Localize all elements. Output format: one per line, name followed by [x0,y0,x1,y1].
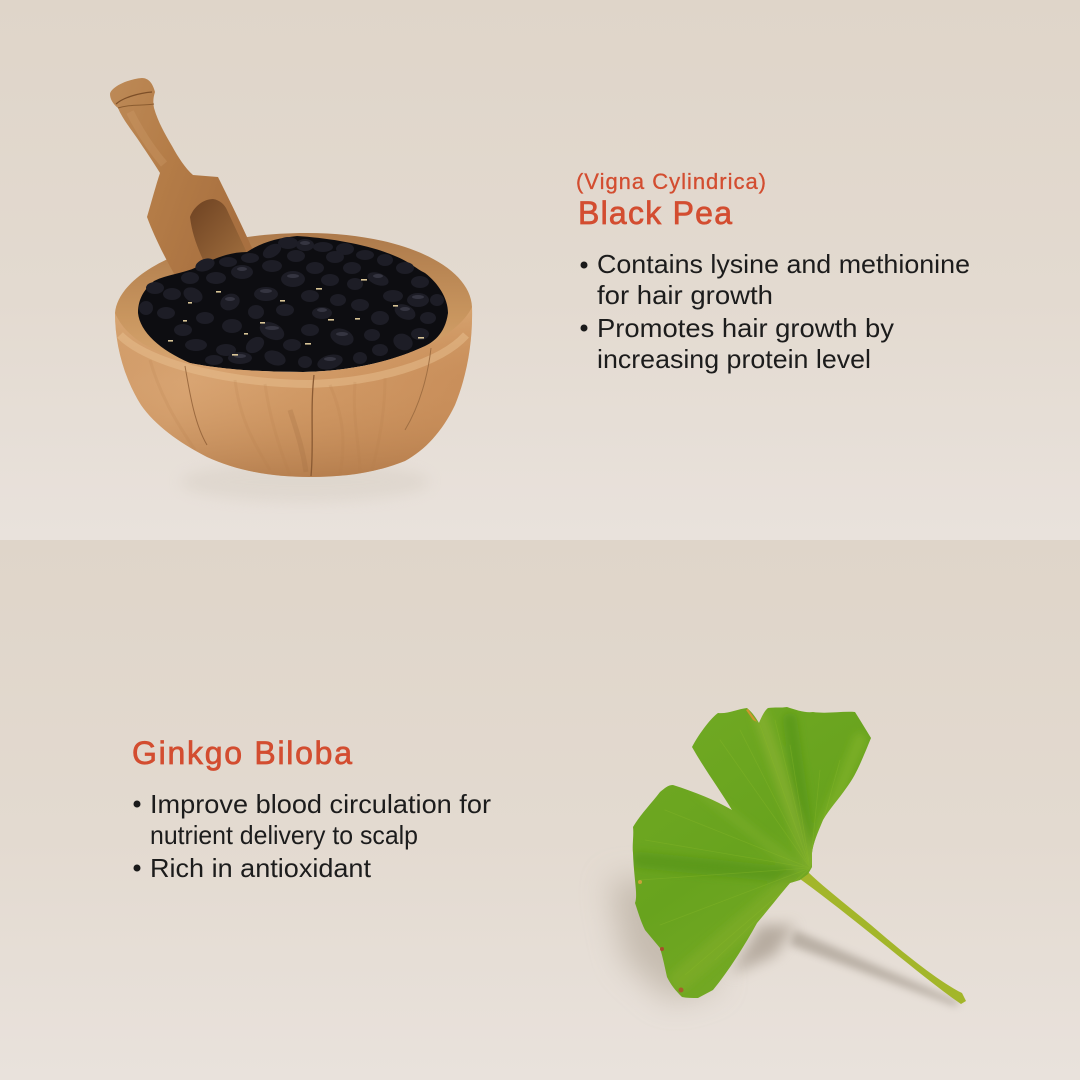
bullet: blood circulation [134,789,491,850]
heading: ginkgo biloba: Ginkgo Biloba [132,735,352,771]
bullet: antioxidant: Rich in antioxidant [150,853,372,883]
beans [138,236,448,372]
bullet: protein level: increasing protein level [597,344,871,374]
bullet: protein level: Promotes hair growth by [597,313,894,343]
panel: black pea background [0,0,1080,540]
leaf blade [633,707,871,998]
heading: black pea: Black Pea [578,195,732,231]
leaf shadow [610,880,960,1006]
leaf stem [800,872,966,1004]
subtitle: latin name: (Vigna Cylindrica) [576,169,766,194]
bullet: protein level [580,313,894,374]
scoop [110,78,253,279]
bullet: blood circulation: nutrient delivery to scalp [150,820,418,850]
image: ginkgo leaf [610,707,966,1006]
leaf veins and tone [640,715,860,980]
bowl inner back rim [115,233,472,375]
bowl shadow [180,462,430,502]
text block: black pea [576,169,970,374]
bullet: lysine and methionine [580,249,970,310]
bowl body [110,300,480,480]
panel: ginkgo biloba background [0,540,1080,1080]
leaf edge spots [638,709,757,992]
bullet: blood circulation: Improve blood circulation for [150,789,491,819]
bullet: lysine and methionine: for hair growth [597,280,773,310]
image: wooden bowl of black peas with scoop [110,78,480,502]
text block: ginkgo biloba [132,735,491,883]
bullet: lysine and methionine: Contains lysine and methionine [597,249,970,279]
